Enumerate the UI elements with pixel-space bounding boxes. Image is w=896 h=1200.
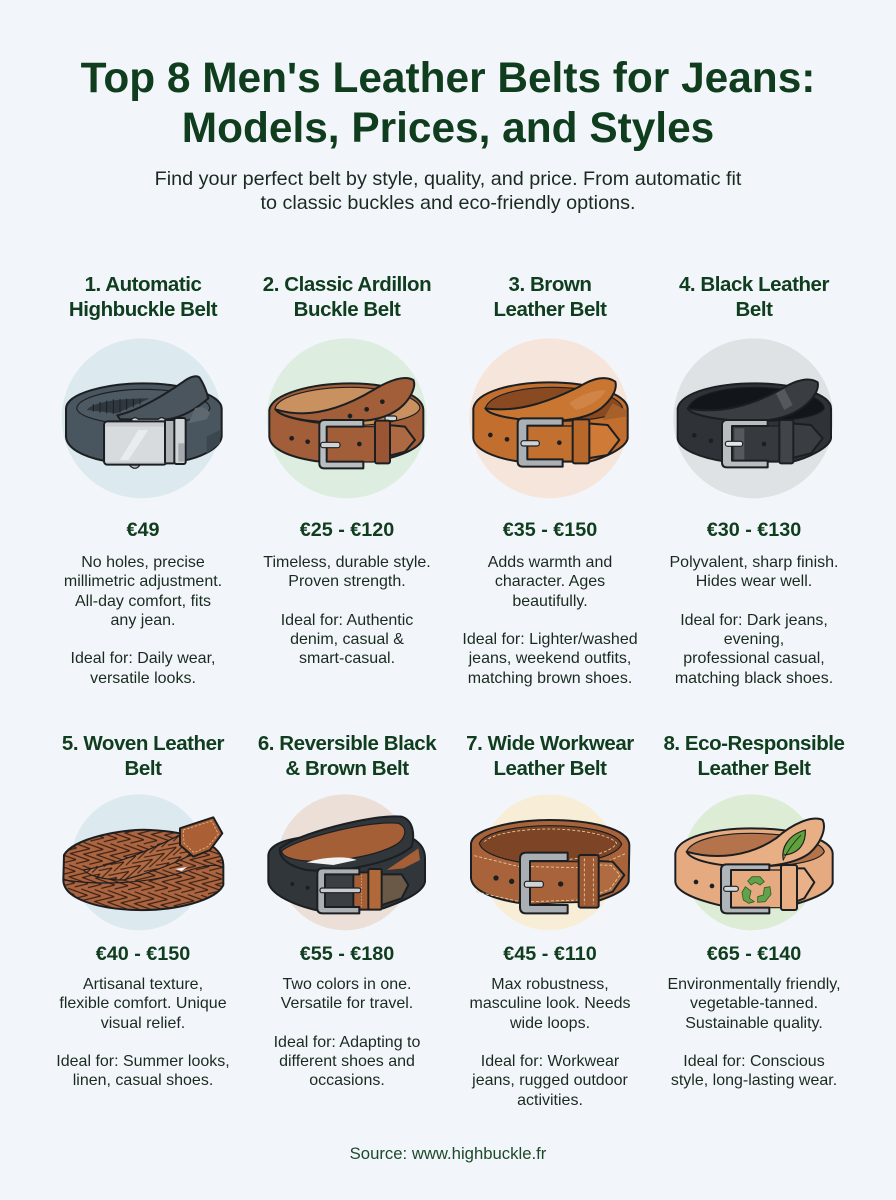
description: All-day comfort, fits: [75, 593, 211, 610]
panel: belt 5 woven leather: [56, 732, 230, 1089]
description: [56, 976, 230, 1089]
description: Timeless, durable style.: [263, 554, 431, 571]
heading: Leather Belt: [493, 757, 607, 780]
icon: tan brown belt: [469, 338, 630, 498]
description: Adds warmth and: [488, 554, 612, 571]
description: Two colors in one.: [283, 976, 411, 993]
icon: reversible belt: [267, 794, 426, 930]
description: Ideal for: Workwear: [481, 1053, 619, 1070]
heading: 5. Woven Leather: [62, 732, 224, 755]
heading: Highbuckle Belt: [69, 298, 217, 321]
price: €40 - €150: [96, 943, 190, 965]
icon: black belt: [674, 338, 834, 498]
description: evening,: [724, 631, 784, 648]
description: beautifully.: [512, 593, 588, 610]
description: Proven strength.: [288, 573, 406, 590]
title: Models, Prices, and Styles: [182, 104, 714, 151]
price: €30 - €130: [707, 519, 801, 541]
title: Top 8 Men's Leather Belts for Jeans:: [81, 54, 815, 101]
price: €45 - €110: [503, 943, 597, 965]
subtitle: [155, 168, 742, 214]
panel: belt 1 automatic highbuckle: [62, 273, 223, 687]
icon: classic brown belt: [266, 338, 427, 498]
description: different shoes and: [279, 1053, 415, 1070]
description: linen, casual shoes.: [73, 1072, 213, 1089]
description: occasions.: [309, 1072, 385, 1089]
description: activities.: [517, 1092, 583, 1109]
heading: 6. Reversible Black: [258, 732, 436, 755]
icon: automatic belt: [62, 338, 223, 498]
heading: Belt: [125, 757, 161, 780]
panel: belt 2 classic ardillon: [263, 273, 431, 667]
heading: [62, 732, 224, 780]
description: [274, 976, 420, 1089]
description: vegetable-tanned.: [690, 995, 818, 1012]
heading: [466, 732, 634, 780]
description: [263, 554, 431, 667]
description: Artisanal texture,: [83, 976, 203, 993]
description: millimetric adjustment.: [64, 573, 222, 590]
heading: 2. Classic Ardillon: [263, 273, 431, 296]
heading: [679, 273, 830, 321]
price: €65 - €140: [707, 943, 801, 965]
heading: Buckle Belt: [294, 298, 400, 321]
description: style, long-lasting wear.: [671, 1072, 837, 1089]
description: Max robustness,: [491, 976, 609, 993]
panel: belt 6 reversible: [258, 732, 437, 1089]
icon: eco belt with leaf and recycle symbol: [674, 794, 834, 930]
description: Ideal for: Lighter/washed: [462, 631, 638, 648]
panel: belt 4 black leather: [670, 273, 838, 687]
description: Environmentally friendly,: [667, 976, 841, 993]
description: jeans, weekend outfits,: [469, 650, 631, 667]
icon: recycle symbol: [742, 877, 771, 903]
description: matching brown shoes.: [468, 670, 632, 687]
heading: Leather Belt: [493, 298, 607, 321]
heading: [69, 273, 218, 321]
description: denim, casual &: [290, 631, 404, 648]
panel: belt 7 wide workwear: [466, 732, 634, 1109]
heading: [493, 273, 607, 321]
heading: 4. Black Leather: [679, 273, 829, 296]
heading: 3. Brown: [509, 273, 591, 296]
heading: 8. Eco-Responsible: [663, 732, 844, 755]
heading: Belt: [736, 298, 772, 321]
description: masculine look. Needs: [470, 995, 630, 1012]
description: character. Ages: [495, 573, 605, 590]
icon: woven belt: [62, 794, 224, 930]
description: visual relief.: [101, 1015, 185, 1032]
description: versatile looks.: [90, 670, 196, 687]
heading: 1. Automatic: [85, 273, 201, 296]
description: No holes, precise: [81, 554, 205, 571]
source: Source: www.highbuckle.fr: [350, 1144, 546, 1163]
description: Sustainable quality.: [685, 1015, 823, 1032]
description: professional casual,: [683, 650, 825, 667]
heading: [263, 273, 431, 321]
icon: wide belt: [470, 794, 630, 930]
description: Hides wear well.: [696, 573, 812, 590]
heading: Leather Belt: [697, 757, 811, 780]
description: jeans, rugged outdoor: [472, 1072, 628, 1089]
description: [462, 554, 638, 687]
description: any jean.: [111, 612, 175, 629]
description: [470, 976, 630, 1109]
price: €49: [126, 519, 160, 541]
description: wide loops.: [510, 1015, 590, 1032]
description: matching black shoes.: [675, 670, 833, 687]
description: Ideal for: Dark jeans,: [680, 612, 828, 629]
description: [64, 554, 222, 687]
panel: belt 8 eco-responsible: [663, 732, 844, 1089]
subtitle: to classic buckles and eco-friendly options.: [261, 192, 635, 214]
price: €25 - €120: [300, 519, 394, 541]
price: €35 - €150: [503, 519, 597, 541]
price: €55 - €180: [300, 943, 394, 965]
description: flexible comfort. Unique: [59, 995, 227, 1012]
panel: belt 3 brown leather: [462, 273, 638, 687]
description: Polyvalent, sharp finish.: [670, 554, 838, 571]
title: [81, 54, 815, 151]
description: [667, 976, 841, 1089]
heading: 7. Wide Workwear: [466, 732, 634, 755]
heading: [258, 732, 437, 780]
description: Ideal for: Conscious: [683, 1053, 825, 1070]
description: [670, 554, 838, 687]
heading: & Brown Belt: [285, 757, 409, 780]
description: Ideal for: Adapting to: [274, 1034, 420, 1051]
description: Versatile for travel.: [281, 995, 413, 1012]
heading: [663, 732, 844, 780]
description: Ideal for: Daily wear,: [71, 650, 215, 667]
description: smart-casual.: [299, 650, 395, 667]
subtitle: Find your perfect belt by style, quality, and price. From automatic fit: [155, 168, 741, 190]
description: Ideal for: Authentic: [281, 612, 413, 629]
description: Ideal for: Summer looks,: [56, 1053, 230, 1070]
